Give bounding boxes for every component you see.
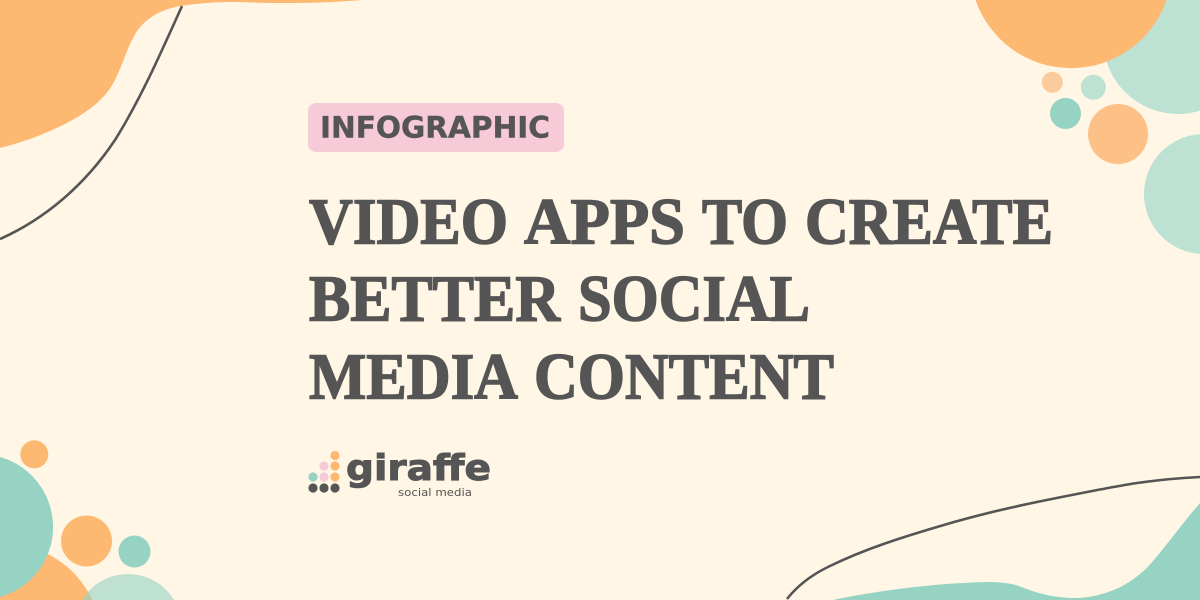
- tag: INFOGRAPHIC: [308, 103, 564, 152]
- title: CONTENT: [534, 340, 834, 414]
- bottom-right decoration: teal blob: [833, 503, 1200, 600]
- title: VIDEO: [309, 186, 508, 258]
- title: APPS: [524, 186, 685, 258]
- title: [309, 186, 1053, 414]
- logo: giraffe social media: [308, 448, 491, 499]
- bottom-left decoration: circle cluster: [0, 440, 174, 600]
- title: TO: [702, 186, 788, 258]
- title: SOCIAL: [578, 262, 810, 336]
- bottom-right decoration: curved line: [787, 477, 1200, 599]
- logo wordmark: giraffe: [346, 448, 491, 489]
- title: MEDIA: [309, 340, 518, 414]
- logo tagline: social media: [398, 486, 472, 499]
- title: CREATE: [805, 186, 1053, 258]
- top-left decoration: curved line: [0, 6, 182, 239]
- tag: INFOGRAPHIC: INFOGRAPHIC: [320, 110, 550, 144]
- top-left decoration: orange blob: [0, 0, 363, 148]
- icon: logo dots: [308, 451, 340, 493]
- top-right decoration: circle cluster: [976, 0, 1200, 254]
- title: BETTER: [309, 262, 561, 336]
